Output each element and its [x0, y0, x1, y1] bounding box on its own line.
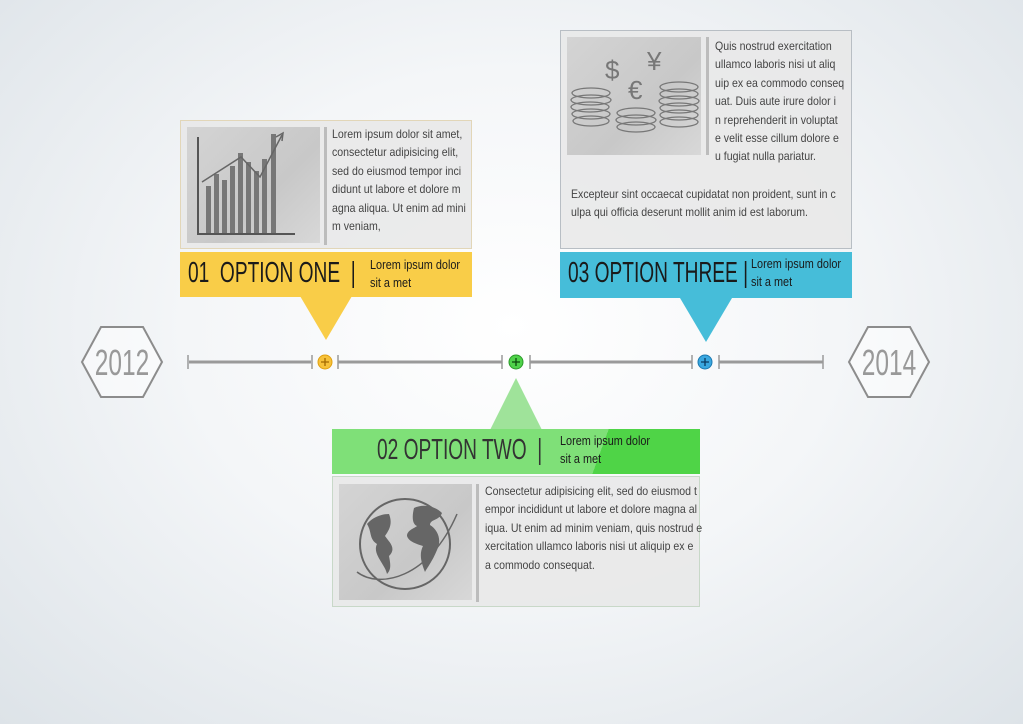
arrow	[300, 297, 352, 340]
marker: green	[508, 354, 524, 370]
text block: sed do eiusmod tempor inci	[332, 164, 461, 178]
heading bar	[332, 429, 700, 474]
text block: n reprehenderit in voluptat	[715, 113, 838, 127]
hexagon: 2012: 2012	[95, 342, 149, 383]
text block: Excepteur sint occaecat cupidatat non proident, sunt in c	[571, 187, 836, 201]
arrow	[680, 298, 732, 342]
hexagon: 2014: 2014	[862, 342, 916, 383]
icon: coins and currency	[567, 37, 701, 155]
heading bar: 01 OPTION ONE |	[188, 257, 356, 289]
heading bar: sit a met	[560, 452, 601, 466]
heading bar: 03 OPTION THREE |	[568, 257, 748, 289]
text block	[715, 39, 844, 163]
icon: coins and currency: €	[628, 75, 643, 105]
heading bar: Lorem ipsum dolor	[751, 257, 841, 271]
arrow	[490, 378, 542, 429]
text block: uip ex ea commodo conseq	[715, 76, 844, 90]
text block: e velit esse cillum dolore e	[715, 131, 839, 145]
text block: Quis nostrud exercitation	[715, 39, 832, 53]
content box	[180, 120, 472, 249]
heading bar	[180, 252, 472, 297]
icon: coins and currency: ¥	[646, 46, 662, 76]
text block: iqua. Ut enim ad minim veniam, quis nostrud e	[485, 521, 702, 535]
text block: agna aliqua. Ut enim ad mini	[332, 201, 466, 215]
heading bar: 02 OPTION TWO |	[377, 434, 542, 466]
text block: Lorem ipsum dolor sit amet,	[332, 127, 462, 141]
panel: option one	[180, 120, 472, 340]
text block: didunt ut labore et dolore m	[332, 182, 461, 196]
marker: yellow	[318, 354, 332, 370]
icon: bar chart	[187, 127, 320, 243]
text block: m veniam,	[332, 219, 381, 233]
heading bar: Lorem ipsum dolor	[370, 258, 460, 272]
heading bar: Lorem ipsum dolor	[560, 434, 650, 448]
text block: Consectetur adipisicing elit, sed do eiusmod t	[485, 484, 697, 498]
icon: globe	[339, 484, 472, 600]
text block: ulpa qui officia deserunt mollit anim id est laborum.	[571, 205, 808, 219]
panel: option two	[332, 378, 702, 607]
icon: coins and currency: $	[605, 55, 620, 85]
text block	[332, 127, 466, 233]
heading bar: sit a met	[370, 276, 411, 290]
content box	[560, 30, 852, 249]
text block: consectetur adipisicing elit,	[332, 145, 458, 159]
panel: option three	[560, 30, 852, 342]
hexagon: 2012	[81, 326, 163, 398]
heading bar	[560, 252, 852, 298]
hexagon: 2014	[848, 326, 930, 398]
marker: blue	[698, 354, 712, 370]
text block: uat. Duis aute irure dolor i	[715, 94, 836, 108]
text block	[571, 187, 836, 219]
text block: empor incididunt ut labore et dolore magna al	[485, 502, 697, 516]
text block: xercitation ullamco laboris nisi ut aliquip ex e	[485, 539, 693, 553]
text block	[485, 484, 702, 572]
heading bar: sit a met	[751, 275, 792, 289]
text block: ullamco laboris nisi ut aliq	[715, 57, 835, 71]
text block: u fugiat nulla pariatur.	[715, 149, 816, 163]
text block: a commodo consequat.	[485, 558, 595, 572]
content box	[332, 476, 700, 607]
